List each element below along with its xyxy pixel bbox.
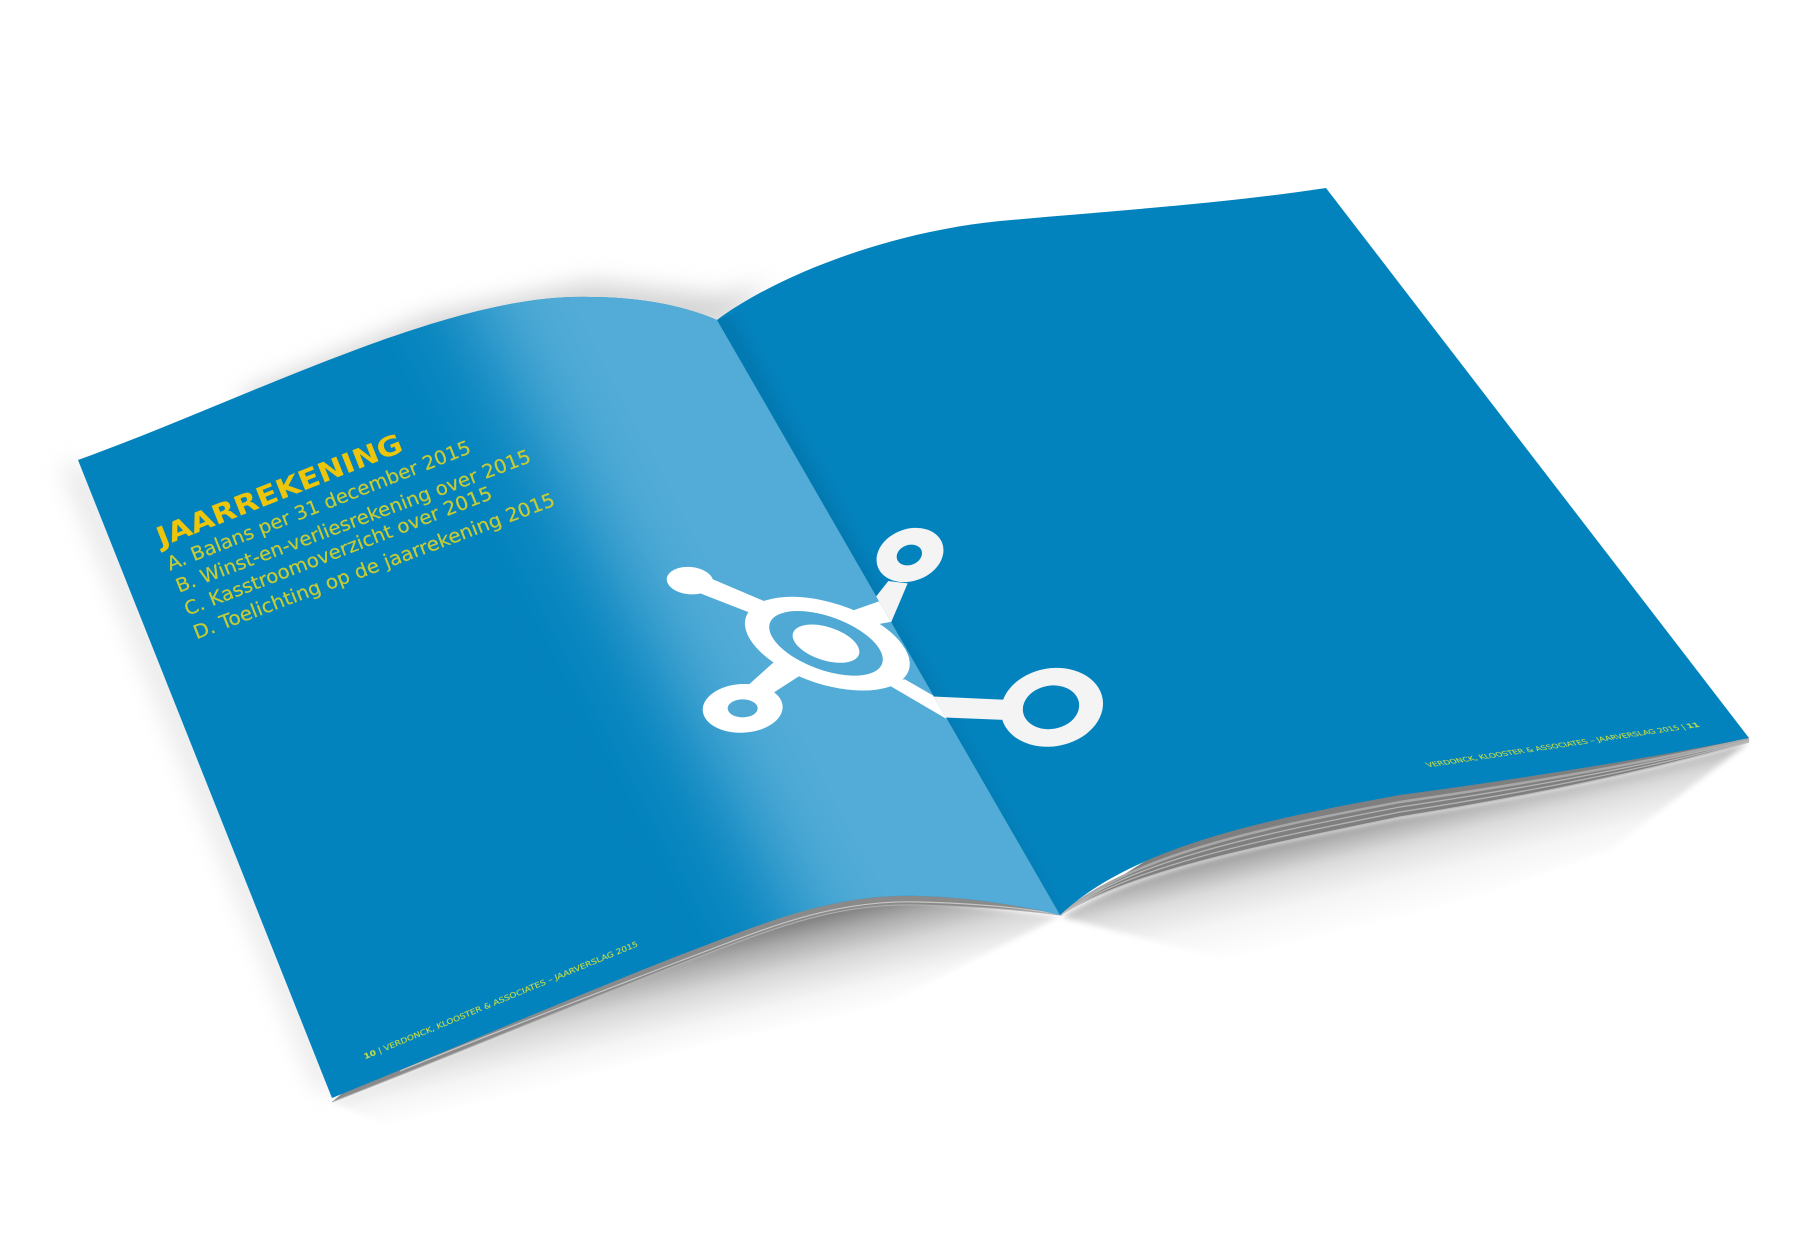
shadow behind top of left page xyxy=(240,282,770,420)
list item D: D. Toelichting op de jaarrekening 2015 xyxy=(190,489,558,644)
footer: left page: 10 | VERDONCK, KLOOSTER & ASSOCIATES – JAARVERSLAG 2015 xyxy=(362,939,639,1061)
heading: Jaarrekening: JAARREKENING xyxy=(150,429,407,554)
list item C: C. Kasstroomoverzicht over 2015 xyxy=(181,482,495,620)
panel: right page xyxy=(717,188,1749,915)
paper stack: right page xyxy=(1060,700,1749,915)
footer: right page: VERDONCK, KLOOSTER & ASSOCIATES – JAARVERSLAG 2015 | 11 xyxy=(1424,721,1701,769)
icon: network logo across spread xyxy=(666,519,1109,755)
paper stack: left page xyxy=(332,700,1060,1102)
logo: left page part xyxy=(666,565,948,735)
shadow under right page xyxy=(1062,742,1749,960)
panel: left page xyxy=(78,296,1060,1098)
list item B: B. Winst-en-verliesrekening over 2015 xyxy=(173,446,534,597)
spine shadow on right page xyxy=(717,300,1085,915)
logo: right page part xyxy=(876,528,1103,747)
text block: contents list xyxy=(164,437,558,644)
shadow under left page xyxy=(332,900,1060,1130)
soft shadow along left edge xyxy=(60,462,340,1090)
list item A: A. Balans per 31 december 2015 xyxy=(164,437,474,575)
